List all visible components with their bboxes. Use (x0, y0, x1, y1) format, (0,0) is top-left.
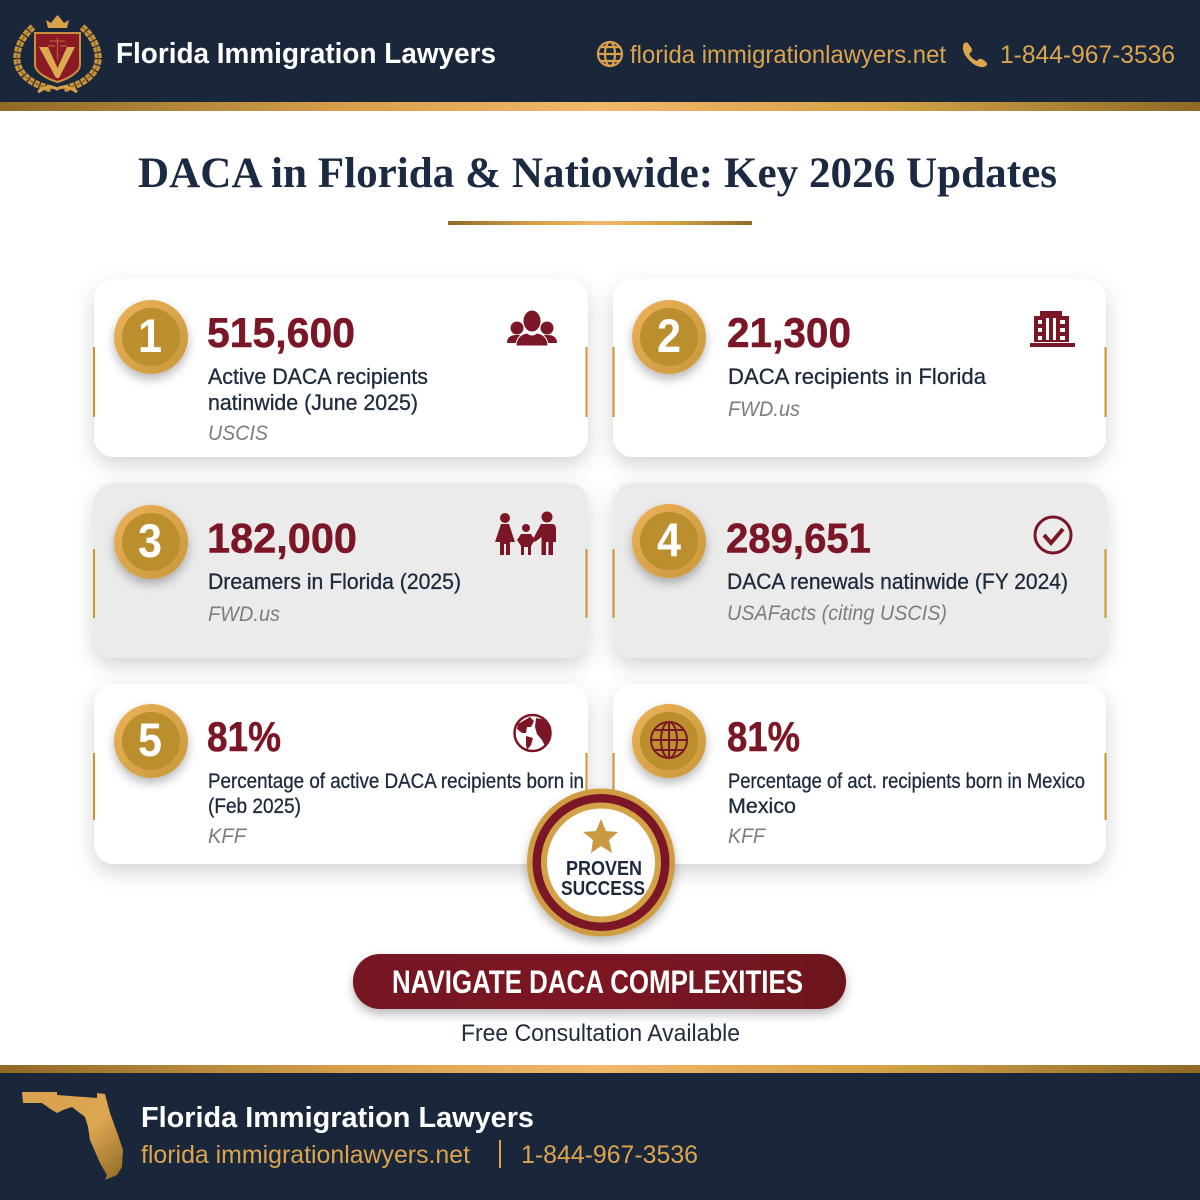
panel: card 5: Percentage of active DACA recipients born in (208, 770, 584, 793)
panel: card 2: 21,300 (727, 309, 851, 356)
panel: card 3: FWD.us (208, 603, 280, 626)
panel: card 5: KFF (208, 825, 247, 848)
header website: florida immigrationlawyers.net (630, 41, 946, 69)
icon: people group (507, 310, 557, 346)
panel: card 1: 515,600 (207, 309, 355, 356)
icon: Florida map (22, 1092, 123, 1180)
panel: card 3: Dreamers in Florida (2025) (208, 569, 461, 594)
panel: card 4: USAFacts (citing USCIS) (727, 602, 947, 625)
panel: card 4 (612, 483, 1106, 658)
icon: wireframe globe (651, 722, 687, 758)
icon: firm crest logo (17, 15, 98, 92)
panel: card 4: 289,651 (726, 514, 871, 562)
icon: gold star (583, 819, 618, 853)
icon: web globe (598, 42, 622, 66)
header band (0, 0, 1200, 111)
icon: building (1030, 311, 1075, 347)
panel: card 5 (93, 684, 588, 864)
panel: card 1: natinwide (June 2025) (208, 390, 418, 415)
panel: card 4: 4 (657, 513, 681, 566)
badge: proven success seal: SUCCESS (561, 878, 645, 900)
icon: phone (963, 42, 987, 67)
header firm name: Florida Immigration Lawyers (116, 38, 496, 70)
footer band (0, 1065, 1200, 1200)
panel: card 2: FWD.us (728, 398, 800, 421)
panel: card 1: Active DACA recipients (208, 364, 428, 389)
title: DACA in Florida & Natiowide: Key 2026 Updates (138, 150, 1057, 197)
badge: proven success seal (527, 788, 675, 936)
panel: card 6: Percentage of act. recipients born in Mexico (728, 770, 1085, 793)
call to action button (353, 954, 846, 1009)
header phone number: 1-844-967-3536 (1000, 41, 1175, 69)
call to action button: NAVIGATE DACA COMPLEXITIES (392, 964, 803, 1000)
consultation note: Free Consultation Available (461, 1020, 740, 1047)
footer firm name: Florida Immigration Lawyers (141, 1102, 534, 1134)
panel: card 1: USCIS (208, 422, 268, 445)
footer website: florida immigrationlawyers.net (141, 1141, 470, 1169)
panel: card 3 (93, 483, 588, 658)
icon: family (495, 512, 556, 555)
panel: card 5: 5 (138, 713, 162, 766)
panel: card 6: Mexico (728, 795, 796, 818)
footer divider (499, 1140, 501, 1168)
panel: card 5: 81% (207, 713, 281, 760)
icon: check circle (1035, 517, 1071, 553)
seal text: PROVEN (566, 858, 642, 880)
footer phone number: 1-844-967-3536 (521, 1141, 698, 1169)
panel: card 2: 2 (657, 309, 681, 362)
panel: card 1: 1 (138, 309, 162, 362)
panel: card 1 (93, 279, 588, 457)
icon: earth globe (514, 715, 551, 751)
panel: card 6: KFF (728, 825, 766, 848)
panel: card 6 (612, 684, 1106, 864)
panel: card 5: (Feb 2025) (208, 795, 301, 818)
panel: card 3: 182,000 (207, 514, 357, 562)
panel: card 4: DACA renewals natinwide (FY 2024) (727, 569, 1068, 594)
panel: card 3: 3 (138, 514, 162, 567)
panel: card 2 (612, 279, 1106, 457)
panel: card 6: 81% (727, 713, 800, 760)
title underline (448, 221, 752, 225)
panel: card 2: DACA recipients in Florida (728, 364, 987, 389)
